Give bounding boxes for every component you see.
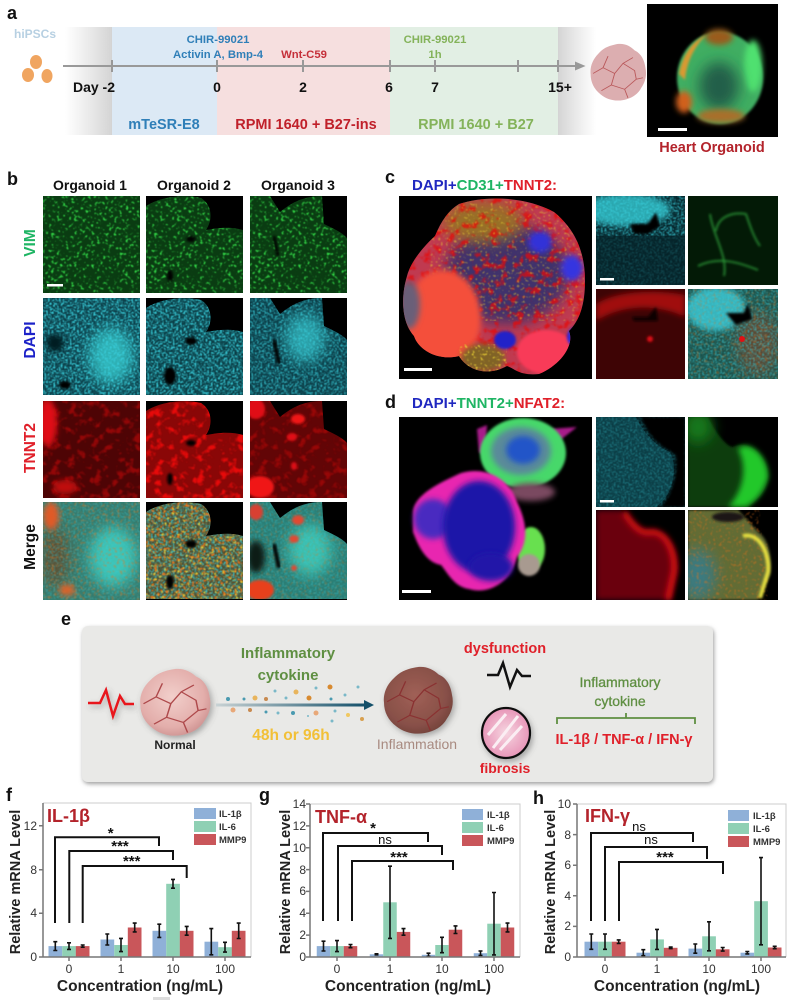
tick labels [293, 797, 504, 976]
significance marks [632, 819, 674, 866]
tick labels: 100 [215, 962, 235, 976]
heart organoid micrograph [647, 4, 778, 137]
timeline day labels: 6 [385, 79, 393, 95]
panel d stain heading: DAPI+TNNT2+NFAT2: [412, 395, 565, 412]
row labels: DAPI [22, 321, 39, 359]
tick labels: 10 [293, 841, 306, 855]
timeline day labels: 0 [213, 79, 221, 95]
tick labels: 1 [387, 962, 394, 976]
VIM organoid 2 [146, 196, 243, 293]
icon: red heartbeat [88, 690, 134, 716]
tick labels: 4 [564, 889, 571, 903]
timeline day labels: 2 [299, 79, 307, 95]
DAPI organoid 3 [250, 298, 347, 395]
tick labels: 2 [564, 919, 571, 933]
chart title: IFN-γ [585, 806, 630, 826]
panel letter h: h [533, 788, 544, 808]
NFAT2 micrograph d [596, 510, 685, 600]
tick labels: 0 [30, 950, 37, 964]
y axis title: Relative mRNA Level [543, 810, 559, 954]
panel c: DAPI CD31 TNNT2 staining [385, 167, 780, 379]
legend: MMP9 [753, 837, 780, 848]
y axis title: Relative mRNA Level [8, 810, 24, 954]
inflammation label: Inflammation [377, 736, 457, 752]
icon: black heartbeat [487, 663, 531, 687]
tick labels: 14 [293, 797, 306, 811]
tick labels: 0 [602, 962, 609, 976]
axes and ticks [306, 804, 520, 961]
tick labels: 0 [564, 950, 571, 964]
plot frame [310, 804, 520, 957]
tick labels: 0 [334, 962, 341, 976]
bracket [557, 713, 695, 724]
x axis title: Concentration (ng/mL) [57, 978, 223, 995]
treatment labels: Activin A, Bmp-4 [173, 49, 264, 61]
tick labels [24, 819, 235, 976]
icon: organoid [590, 44, 646, 101]
legend: MMP9 [219, 835, 246, 846]
timeline day labels: 15+ [548, 79, 572, 95]
x axis title: Concentration (ng/mL) [594, 978, 760, 995]
column headings: Organoid 3 [261, 177, 335, 193]
schematic background card [82, 626, 713, 782]
heart organoid caption: Heart Organoid [659, 140, 765, 156]
panel e: inflammatory cytokine schematic [61, 609, 713, 782]
significance marks: *** [123, 853, 141, 870]
significance marks: * [370, 820, 376, 837]
tick labels: 100 [751, 962, 771, 976]
cytokine heading: cytokine [258, 667, 318, 684]
DAPI organoid 1 [43, 298, 140, 395]
significance marks: *** [656, 849, 674, 866]
significance marks: * [108, 825, 114, 842]
panel letter b: b [7, 169, 18, 189]
panel c stain heading: DAPI+CD31+TNNT2: [412, 177, 557, 194]
DAPI micrograph c [596, 196, 685, 285]
error bars [322, 866, 510, 956]
TNNT2 micrograph c [596, 289, 685, 379]
panel d: DAPI TNNT2 NFAT2 staining [385, 392, 778, 601]
cytokine list heading: cytokine [594, 693, 646, 709]
bars [317, 902, 514, 957]
legend [728, 810, 780, 848]
tick labels: 0 [299, 950, 306, 964]
timeline axis arrow [63, 60, 583, 72]
cytokine list heading [580, 674, 660, 709]
legend [462, 809, 514, 847]
cytokine heading: Inflammatory [241, 645, 336, 662]
panel f: IL-1β bar chart [6, 785, 251, 995]
tick labels: 10 [558, 797, 571, 811]
axes and ticks [39, 803, 251, 961]
tick labels: 1 [118, 962, 125, 976]
VIM organoid 1 [43, 196, 140, 293]
panel h: IFN-γ bar chart [533, 788, 786, 995]
medium labels: RPMI 1640 + B27-ins [235, 117, 377, 133]
tick labels: 10 [166, 962, 180, 976]
tick labels: 12 [24, 819, 37, 833]
tick labels: 10 [435, 962, 449, 976]
arrow: exposure [216, 700, 374, 710]
panel b: immunofluorescence grid [7, 169, 347, 600]
scale bar [402, 590, 431, 593]
y axis title: Relative mRNA Level [278, 810, 294, 954]
chart title: IL-1β [47, 806, 90, 826]
legend: IL-6 [753, 824, 770, 835]
scale bar [404, 368, 432, 371]
legend [194, 808, 246, 846]
DAPI organoid 2 [146, 298, 243, 395]
timeline day labels: 7 [431, 79, 439, 95]
panel letter d: d [385, 392, 396, 412]
error bars [53, 879, 241, 955]
icon: hiPSC cells [22, 55, 52, 83]
dysfunction label: dysfunction [464, 641, 546, 657]
panel letter a: a [7, 3, 18, 23]
cytokine names: IL-1β / TNF-α / IFN-γ [556, 732, 692, 748]
tick labels: 4 [299, 906, 306, 920]
tick labels [558, 797, 771, 976]
row labels [22, 229, 39, 570]
TNNT2 micrograph d [688, 417, 778, 507]
treatment labels: CHIR-99021 [404, 34, 466, 46]
panel a: differentiation timeline [7, 3, 778, 156]
x axis title: Concentration (ng/mL) [325, 978, 491, 995]
merge organoid 3 [250, 502, 347, 600]
row labels: TNNT2 [22, 423, 39, 473]
legend: IL-1β [753, 811, 776, 822]
medium labels: RPMI 1640 + B27 [418, 117, 534, 133]
hiPSCs label: hiPSCs [14, 27, 56, 41]
legend: IL-1β [219, 809, 242, 820]
normal label: Normal [154, 738, 196, 752]
tick labels: 12 [293, 819, 306, 833]
VIM organoid 3 [250, 196, 347, 293]
column headings [53, 177, 335, 193]
tick labels: 100 [484, 962, 504, 976]
tick labels: 4 [30, 906, 37, 920]
row labels: Merge [22, 524, 39, 570]
legend: IL-1β [487, 810, 510, 821]
significance marks: *** [390, 849, 408, 866]
axes and ticks [573, 804, 786, 961]
treatment labels: CHIR-99021 [187, 34, 249, 46]
whole organoid micrograph d [399, 417, 592, 600]
tick labels: 1 [654, 962, 661, 976]
icon: inflamed organoid [384, 667, 453, 734]
tick labels: 8 [299, 863, 306, 877]
cytokine heading [241, 645, 336, 684]
duration label: 48h or 96h [252, 727, 330, 744]
scale bar [658, 128, 687, 131]
plot frame [43, 803, 251, 957]
TNNT2 organoid 3 [250, 401, 347, 498]
panel letter e: e [61, 609, 71, 629]
legend: MMP9 [487, 836, 514, 847]
column headings: Organoid 2 [157, 177, 231, 193]
legend: IL-6 [219, 822, 236, 833]
merge organoid 2 [146, 502, 243, 600]
icon: cytokine particles [226, 684, 364, 722]
timeline day labels [73, 79, 572, 95]
tick labels: 2 [299, 928, 306, 942]
panel letter f: f [6, 785, 13, 805]
panel letter g: g [259, 785, 270, 805]
significance brackets [55, 837, 187, 923]
plot frame [577, 804, 786, 957]
significance brackets [323, 833, 453, 921]
tick labels: 10 [702, 962, 716, 976]
CD31 micrograph c [688, 196, 778, 285]
bars [584, 901, 782, 957]
significance marks: ns [378, 832, 392, 847]
icon: normal organoid [140, 669, 210, 736]
significance marks: ns [644, 832, 658, 847]
whole organoid micrograph c [399, 196, 592, 379]
significance marks [370, 820, 408, 866]
panel letter c: c [385, 167, 395, 187]
treatment labels: 1h [428, 49, 442, 61]
significance marks: ns [632, 819, 646, 834]
medium labels [128, 117, 534, 133]
icon: fibrosis tissue [482, 708, 530, 758]
medium labels: mTeSR-E8 [128, 117, 200, 133]
legend: IL-6 [487, 823, 504, 834]
merge micrograph c [688, 289, 778, 379]
significance brackets [591, 833, 723, 921]
significance marks [108, 825, 141, 870]
row labels: VIM [22, 229, 39, 257]
timeline day labels: Day -2 [73, 79, 115, 95]
chart title: TNF-α [315, 807, 367, 827]
significance marks: *** [111, 838, 129, 855]
error bars [589, 858, 777, 956]
DAPI micrograph d [596, 417, 685, 507]
panel g: TNF-α bar chart [259, 785, 520, 995]
tick labels: 6 [564, 858, 571, 872]
TNNT2 organoid 2 [146, 401, 243, 498]
tick labels: 8 [564, 828, 571, 842]
tick labels: 6 [299, 884, 306, 898]
tick labels: 0 [66, 962, 73, 976]
column headings: Organoid 1 [53, 177, 127, 193]
TNNT2 organoid 1 [43, 401, 140, 498]
treatment labels: Wnt-C59 [281, 49, 327, 61]
tick labels: 8 [30, 863, 37, 877]
merge organoid 1 [43, 502, 140, 600]
cytokine list heading: Inflammatory [580, 674, 660, 690]
merge micrograph d [688, 510, 778, 600]
bars [48, 884, 246, 957]
medium bands [65, 27, 596, 135]
fibrosis label: fibrosis [480, 760, 530, 776]
treatment labels [173, 34, 466, 61]
